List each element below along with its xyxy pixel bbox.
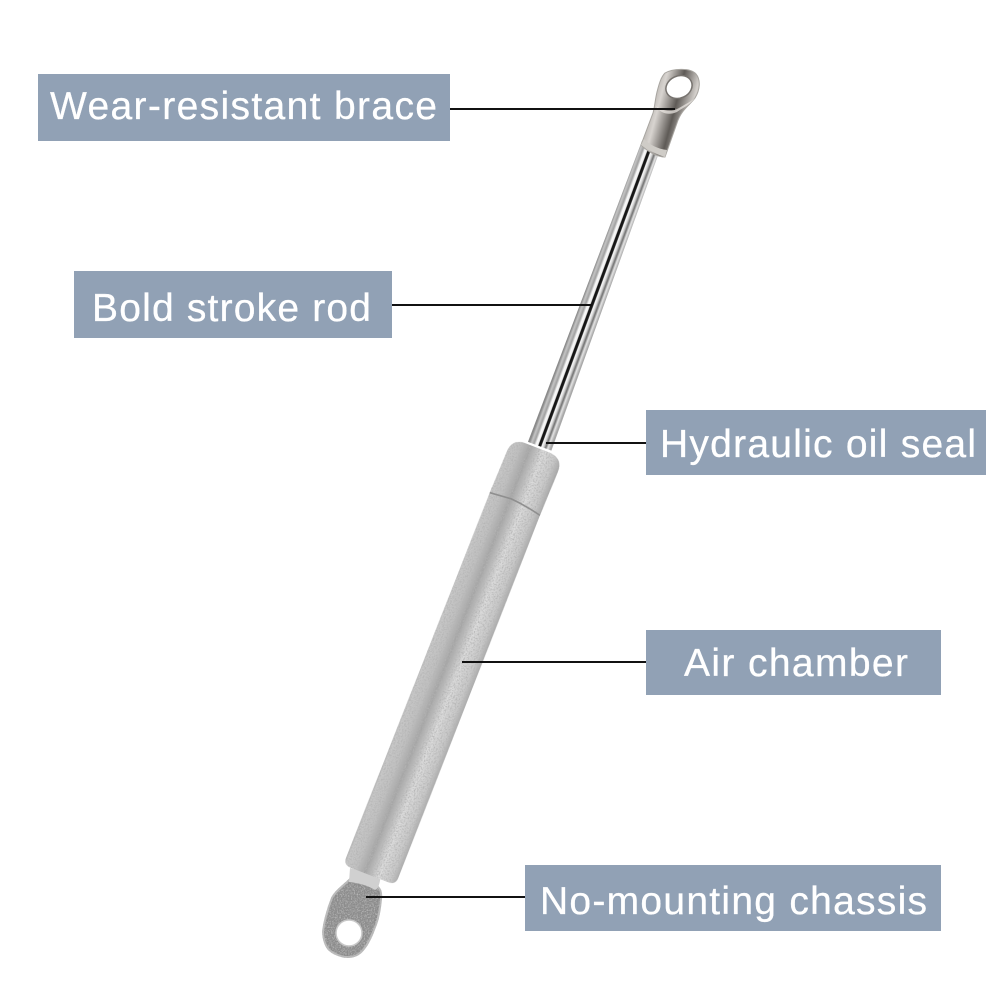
top mounting eye — [641, 69, 699, 157]
label: no-mounting chassis — [525, 865, 941, 931]
leader line: brace — [450, 108, 675, 110]
label: wear-resistant brace — [38, 74, 450, 141]
cylinder body — [343, 437, 563, 886]
leader line: rod — [392, 304, 592, 306]
label: air chamber — [646, 630, 941, 695]
piston rod — [528, 140, 663, 451]
gas spring illustration — [323, 69, 699, 957]
bottom mounting eye — [323, 868, 381, 957]
seam — [489, 491, 542, 515]
leader line: chassis — [366, 896, 525, 898]
label: bold stroke rod — [74, 271, 392, 338]
leader line: oil seal — [546, 442, 646, 444]
label: hydraulic oil seal: Hydraulic oil seal — [660, 423, 976, 466]
leader line: air chamber — [462, 661, 646, 663]
cylinder end cap — [489, 438, 563, 515]
label: hydraulic oil seal — [646, 410, 986, 475]
label: bold stroke rod: Bold stroke rod — [92, 287, 371, 330]
label: air chamber: Air chamber — [684, 642, 908, 685]
label: wear-resistant brace: Wear-resistant brace — [50, 85, 437, 128]
label: no-mounting chassis: No-mounting chassis — [540, 880, 927, 923]
